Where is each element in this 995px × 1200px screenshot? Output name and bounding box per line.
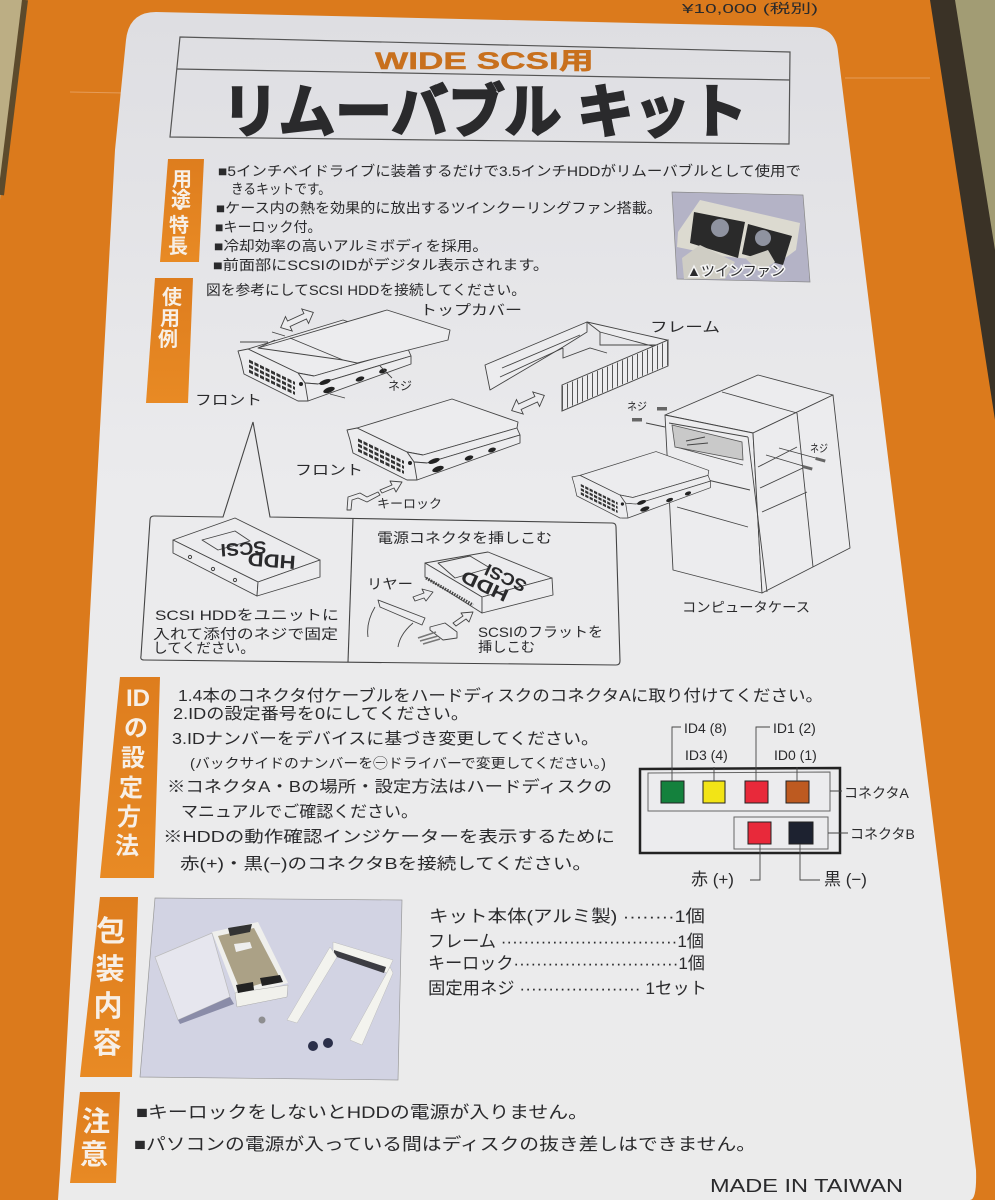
heading label: contents: 容 [92, 1027, 122, 1060]
diagram: SCSI HDD [173, 518, 320, 596]
ID instructions: 2.IDの設定番号を0にしてください。 [173, 705, 469, 723]
diagram: key lock [347, 481, 442, 511]
ID instructions: 1.4本のコネクタ付ケーブルをハードディスクのコネクタAに取り付けてください。 [178, 686, 823, 705]
heading label: usage: 使 [162, 286, 182, 309]
heading label: uses: 途 [171, 188, 191, 211]
diagram: assembled unit [295, 399, 520, 480]
title: WIDE SCSI: WIDE SCSI用 [375, 48, 594, 75]
diagram: computer case: ネジ [810, 442, 828, 455]
diagram: rear connector: HDD [458, 566, 512, 606]
features text [213, 163, 801, 273]
diagram: front unit with top cover: フロント [195, 392, 262, 408]
heading label: ID: ID [126, 685, 150, 712]
contents list: フレーム ·······························1個 [428, 932, 704, 951]
diagram: front unit with top cover: トップカバー [420, 302, 522, 318]
heading label: usage: 例 [158, 328, 178, 351]
diagram: frame [485, 319, 720, 411]
product photo [140, 898, 402, 1080]
text: HDD installation: 入れて添付のネジで固定 [153, 626, 338, 642]
heading label: ID: 方 [117, 804, 141, 831]
ID instructions: (バックサイドのナンバーを㊀ドライバーで変更してください。) [190, 756, 606, 771]
diagram: front unit with top cover: ネジ [388, 379, 412, 393]
features text: ■ケース内の熱を効果的に放出するツインクーリングファン搭載。 [216, 200, 662, 216]
panel: ID settings [100, 677, 915, 889]
text: HDD installation [153, 607, 339, 656]
contents list: キーロック·····························1個 [428, 954, 705, 973]
connector diagram: 黒 (−) [824, 870, 867, 889]
panel: uses and features [160, 159, 810, 282]
panel: usage example [141, 278, 850, 665]
photo: twin fan [672, 192, 810, 282]
heading label: caution: 意 [80, 1139, 108, 1170]
caution text: ■パソコンの電源が入っている間はディスクの抜き差しはできません。 [134, 1134, 756, 1154]
heading label: usage [146, 278, 193, 403]
ID instructions: マニュアルでご確認ください。 [181, 803, 418, 821]
caution text: ■キーロックをしないとHDDの電源が入りません。 [136, 1103, 588, 1122]
usage lead text: 図を参考にしてSCSI HDDを接続してください。 [206, 282, 526, 298]
callout: install box [141, 422, 620, 665]
photo: twin fan: ▲ツインファン [687, 263, 785, 279]
panel: package contents [80, 897, 707, 1080]
connector diagram: ID1 (2) [773, 720, 816, 736]
heading label: uses: 長 [168, 236, 188, 258]
diagram: SCSI HDD: SCSI [220, 537, 267, 560]
text: HDD installation: SCSI HDDをユニットに [155, 607, 339, 623]
ID instructions: 赤(+)・黒(−)のコネクタBを接続してください。 [180, 855, 592, 873]
heading label: ID: の [124, 715, 148, 742]
title: main: リムーバブル キット [222, 80, 747, 145]
heading label: uses: 用 [172, 169, 192, 191]
heading label: uses [160, 159, 204, 262]
caution text [134, 1103, 756, 1154]
heading label: ID: 定 [119, 775, 143, 802]
features text: ■前面部にSCSIのIDがデジタル表示されます。 [213, 257, 549, 273]
diagram: rear connector: リヤー [367, 576, 413, 592]
diagram: assembled unit: フロント [295, 462, 363, 478]
diagram: computer case: ネジ [627, 400, 647, 413]
ID instructions [163, 686, 823, 873]
features text: きるキットです。 [231, 181, 331, 197]
features text: ■冷却効率の高いアルミボディを採用。 [214, 238, 488, 254]
heading label: ID: 法 [115, 833, 139, 860]
heading label: uses: 特 [169, 214, 189, 237]
text: flat cable: 挿しこむ [478, 639, 535, 655]
text: flat cable [478, 624, 603, 655]
heading label: contents: 内 [93, 990, 123, 1023]
diagram: rear connector [367, 552, 553, 647]
heading label: uses: ・ [170, 198, 190, 220]
made in: MADE IN TAIWAN [710, 1175, 903, 1196]
heading label: ID: 設 [121, 745, 145, 772]
heading label: contents: 装 [95, 953, 125, 986]
text: power connector: 電源コネクタを挿しこむ [377, 530, 552, 546]
connector diagram: コネクタA [844, 785, 909, 801]
title block [170, 37, 790, 145]
connector diagram: コネクタB [850, 826, 915, 842]
connector diagram: 赤 (+) [691, 870, 734, 889]
contents list: 固定用ネジ ····················· 1セット [428, 979, 707, 998]
heading label: ID [100, 677, 160, 878]
arrow: double arrow [508, 388, 548, 418]
diagram: SCSI HDD: HDD [247, 548, 296, 572]
diagram: rear connector: SCSI [482, 560, 530, 596]
contents list [428, 907, 707, 998]
features text: ■5インチベイドライブに装着するだけで3.5インチHDDがリムーバブルとして使用で [218, 163, 801, 179]
connector diagram: ID0 (1) [774, 747, 817, 763]
diagram: front unit with top cover [195, 302, 522, 408]
heading label: caution [70, 1092, 120, 1183]
contents list: キット本体(アルミ製) ········1個 [429, 907, 705, 926]
heading label: caution: 注 [82, 1106, 110, 1137]
connector diagram: ID4 (8) [684, 720, 727, 736]
heading label: contents [80, 897, 138, 1077]
diagram: frame: フレーム [650, 319, 720, 335]
heading label: usage: 用 [160, 308, 180, 330]
text: HDD installation: してください。 [153, 640, 255, 656]
diagram: computer case: コンピュータケース [682, 600, 810, 615]
connector diagram: ID3 (4) [685, 747, 728, 763]
ID instructions: ※コネクタA・Bの場所・設定方法はハードディスクの [167, 777, 612, 796]
diagram: computer case [572, 375, 850, 615]
price: ¥10,000 (税別) [680, 1, 818, 16]
features text: ■キーロック付。 [215, 219, 321, 235]
ID instructions: 3.IDナンバーをデバイスに基づき変更してください。 [172, 729, 599, 748]
diagram: key lock: キーロック [377, 497, 442, 511]
heading label: contents: 包 [96, 915, 126, 948]
panel: caution [70, 1092, 756, 1183]
text: flat cable: SCSIのフラットを [478, 624, 603, 640]
connector diagram [640, 720, 915, 889]
ID instructions: ※HDDの動作確認インジケーターを表示するために [163, 828, 615, 846]
